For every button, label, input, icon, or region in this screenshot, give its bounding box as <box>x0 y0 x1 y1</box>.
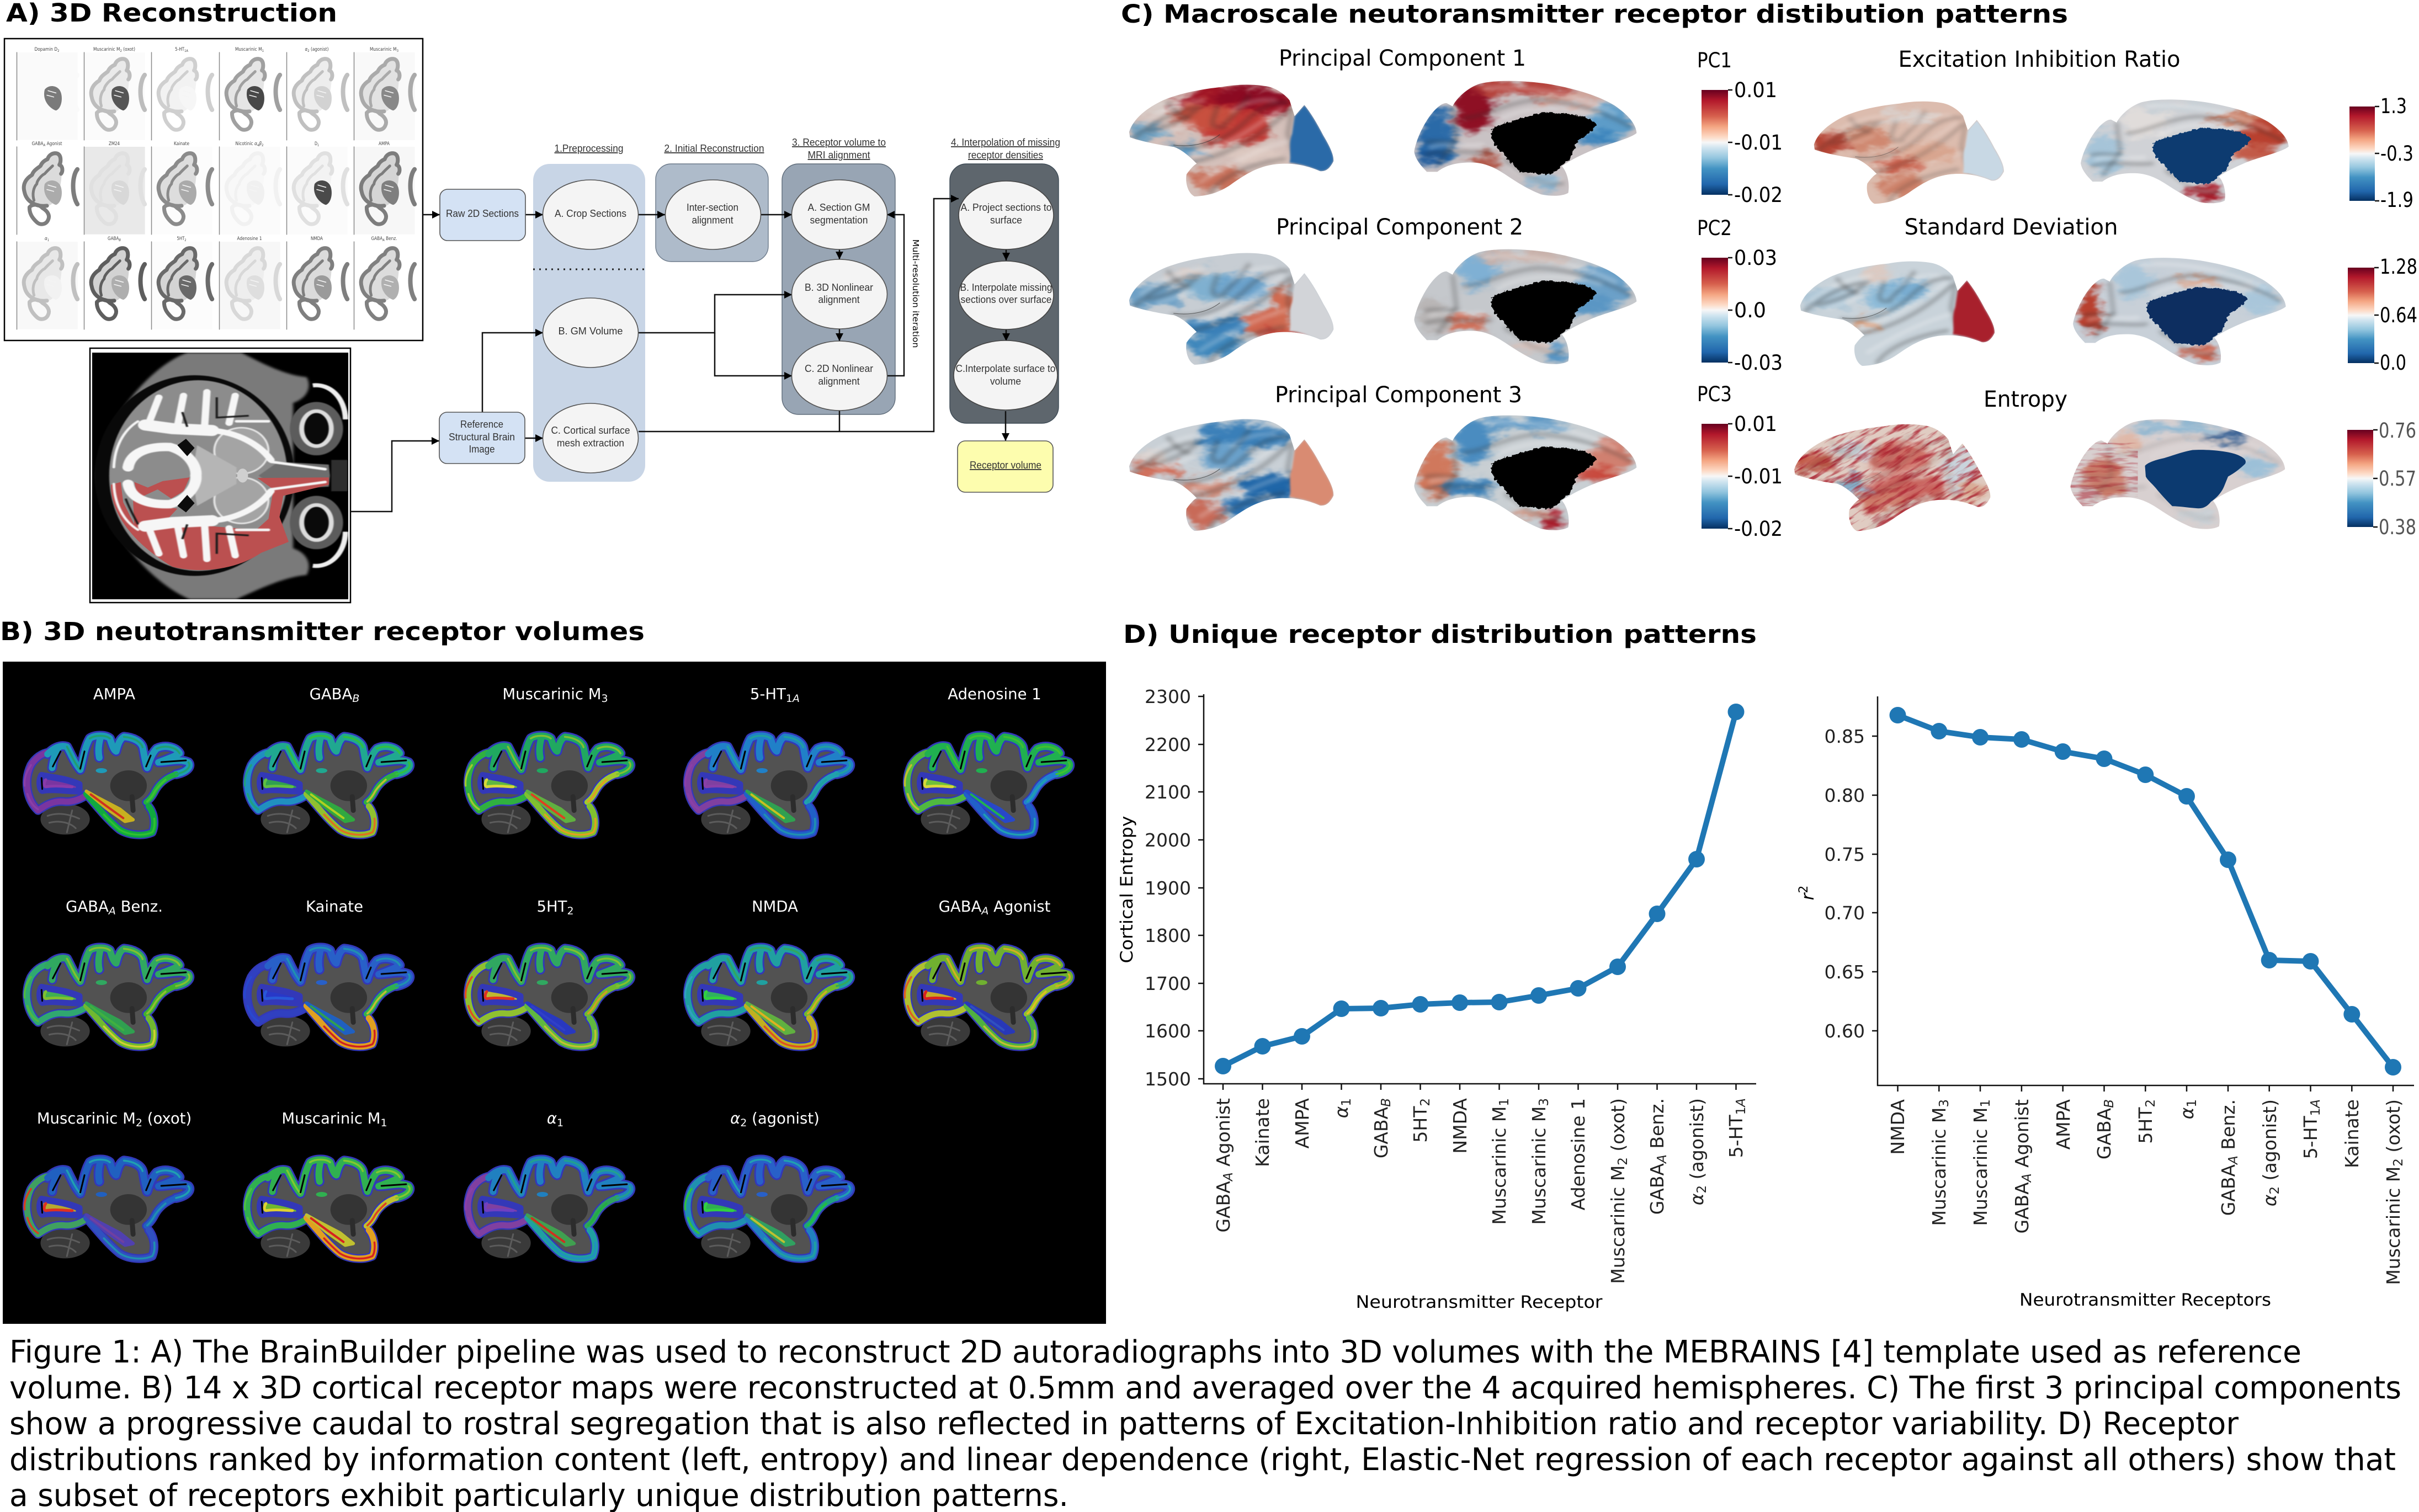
line chart: r squared: A <box>2020 1173 2034 1183</box>
autoradiograph section grid: (agonist) <box>310 47 329 52</box>
receptor map: Muscarinic M2 (oxot): (oxot) <box>142 1110 192 1127</box>
line chart: cortical entropy: Kainate <box>1252 1098 1273 1167</box>
receptor map: 5-HT1A: A <box>791 693 800 705</box>
receptor map: alpha 2 (agonist): (agonist) <box>747 1110 820 1127</box>
brain map: EI ratio medial <box>2081 99 2289 203</box>
autoradiograph section grid: 3 <box>397 49 398 53</box>
panel C: macroscale receptor distribution patterns <box>1123 3 2416 536</box>
receptor map: GABA B <box>244 685 410 835</box>
line chart: r squared: 0.85 <box>1825 726 1865 747</box>
brain map: PC2 lateral <box>1129 253 1333 365</box>
section headers: 1.Preprocessing <box>554 143 624 154</box>
line chart: r squared: GABA <box>2093 1108 2115 1159</box>
autoradiograph section grid: Muscarinic M <box>235 47 268 52</box>
autoradiograph section grid: 1 <box>47 238 49 242</box>
step nodes <box>543 180 1057 473</box>
line chart: r squared: α <box>2259 1194 2280 1206</box>
colorbar: PC2: -0.03 <box>1734 351 1783 375</box>
line chart: r squared: 0.75 <box>1825 844 1865 865</box>
output box: receptor volume <box>958 441 1053 492</box>
receptor map: GABA A Agonist: GABA <box>939 898 981 915</box>
step nodes: Inter-section <box>687 202 738 213</box>
input boxes: Image <box>469 444 495 455</box>
receptor map: 5-HT1A <box>685 685 850 835</box>
receptor map: 5HT2: 5HT <box>536 898 567 915</box>
autoradiograph section grid: Nicotinic α <box>235 141 258 147</box>
line chart: cortical entropy: GABA <box>1370 1107 1392 1158</box>
step nodes: A. Crop Sections <box>555 208 626 219</box>
autoradiograph section grid: AMPA <box>379 141 390 147</box>
panel A: 3D Reconstruction <box>4 0 1060 603</box>
flow diagram <box>350 137 1060 512</box>
line chart: r squared: 0.65 <box>1825 961 1865 983</box>
brain titles: Excitation Inhibition Ratio <box>1899 47 2180 72</box>
line chart: r squared: 5HT <box>2135 1108 2156 1144</box>
section headers: 4. Interpolation of missing <box>951 137 1060 148</box>
output box: receptor volume: Receptor volume <box>970 460 1041 471</box>
colorbar: PC3: PC3 <box>1697 382 1732 406</box>
line chart: r squared: r <box>1798 892 1818 900</box>
line chart: cortical entropy: α <box>1686 1193 1708 1205</box>
step nodes: C. Cortical surface <box>551 425 630 436</box>
receptor map: GABA B: GABA <box>310 685 352 703</box>
autoradiograph section grid: NMDA <box>311 236 323 242</box>
step nodes: C. 2D Nonlinear <box>805 363 873 374</box>
line chart: cortical entropy: 1900 <box>1145 877 1191 899</box>
autoradiograph section grid: Agonist <box>45 141 62 147</box>
section headers <box>554 137 1060 161</box>
line chart: r squared: 2 <box>2268 1186 2282 1194</box>
receptor map: GABA A Benz <box>24 898 189 1047</box>
brain map: standard deviation lateral <box>1800 262 1995 366</box>
black volume panel <box>3 662 1106 1324</box>
heading: B) 3D neutotransmitter receptor volumes: B) 3D neutotransmitter receptor volumes <box>0 617 645 646</box>
receptor map: GABA A Benz: GABA <box>66 898 109 915</box>
figure caption <box>9 1334 2401 1512</box>
line chart: r squared: α <box>2176 1107 2198 1119</box>
line chart: cortical entropy <box>1117 686 1756 1312</box>
brain titles: Principal Component 1 <box>1279 46 1526 71</box>
autoradiograph section grid: (oxot) <box>122 47 135 52</box>
brain titles: Standard Deviation <box>1904 215 2118 240</box>
step nodes: surface <box>990 215 1022 226</box>
receptor map: 5HT2: 2 <box>567 905 574 917</box>
line chart: cortical entropy: NMDA <box>1449 1098 1471 1154</box>
autoradiograph section grid: ZM24 <box>109 141 120 147</box>
autoradiograph section grid: α <box>305 47 307 52</box>
line chart: cortical entropy: A <box>1655 1154 1670 1164</box>
line chart: cortical entropy: 5HT <box>1410 1106 1431 1143</box>
figure caption: distributions ranked by information content (left, entropy) and linear dependence (right, Elastic-Net regression of each receptor against all others) show that <box>9 1442 2396 1478</box>
brain titles: Entropy <box>1984 387 2067 412</box>
autoradiograph section grid: GABA <box>32 141 46 147</box>
line chart: cortical entropy: 2200 <box>1145 734 1191 755</box>
autoradiograph section grid: 5HT <box>177 236 187 242</box>
line chart: r squared: 1 <box>2185 1099 2199 1108</box>
brain titles <box>1275 46 2180 412</box>
brain map: PC3 medial <box>1414 415 1637 530</box>
line chart: r squared: 2 <box>1797 886 1811 893</box>
step nodes: segmentation <box>810 215 868 226</box>
input boxes <box>439 189 525 464</box>
brain map: entropy lateral <box>1794 424 1990 531</box>
step nodes: mesh extraction <box>557 438 624 449</box>
line chart: cortical entropy: 1500 <box>1145 1068 1191 1090</box>
autoradiograph section grid: Muscarinic M <box>370 47 402 52</box>
line chart: cortical entropy: 1600 <box>1145 1020 1191 1042</box>
line chart: r squared: A <box>2226 1156 2241 1165</box>
line chart: r squared: 0.60 <box>1825 1020 1865 1042</box>
line chart: r squared <box>1797 696 2414 1310</box>
brain map: PC2 medial <box>1414 249 1637 364</box>
cortex mask <box>111 477 329 570</box>
line chart: cortical entropy: (agonist) <box>1686 1098 1708 1185</box>
line chart: cortical entropy: AMPA <box>1291 1098 1313 1148</box>
line chart: cortical entropy: 1 <box>1339 1098 1354 1106</box>
colorbar: EI ratio: 1.3 <box>2380 94 2407 118</box>
autoradiograph section grid: GABA <box>108 236 121 242</box>
receptor map: GABA B: B <box>352 693 359 705</box>
panel D: unique receptor distribution patterns <box>1117 620 2414 1312</box>
line chart: cortical entropy: 3 <box>1537 1098 1551 1106</box>
autoradiograph section grid: A <box>382 238 385 242</box>
receptor map: GABA A Agonist <box>905 898 1070 1047</box>
line chart: r squared: NMDA <box>1887 1099 1908 1155</box>
autoradiograph section grid: α <box>45 236 47 242</box>
line chart: r squared: Kainate <box>2341 1099 2363 1168</box>
autoradiograph section grid: 5-HT <box>175 47 187 52</box>
autoradiograph section grid: 1 <box>262 49 264 53</box>
section group boxes <box>533 164 1059 482</box>
brain map: PC3 lateral <box>1129 419 1333 531</box>
input boxes: Structural Brain <box>449 432 515 443</box>
line chart: cortical entropy: Muscarinic M <box>1488 1106 1510 1225</box>
colorbar: PC2: 0.03 <box>1734 246 1777 270</box>
autoradiograph section grid: 2 <box>184 238 187 242</box>
line chart: r squared: GABA <box>2218 1164 2239 1216</box>
colorbar: PC1 <box>1697 49 1783 207</box>
line chart: cortical entropy: Adenosine 1 <box>1567 1098 1589 1210</box>
receptor map: Adenosine 1: Adenosine 1 <box>948 685 1041 703</box>
line chart: r squared: 3 <box>1937 1099 1952 1108</box>
line chart: cortical entropy: 1 <box>1497 1098 1512 1106</box>
autoradiograph section grid: Dopamin D <box>34 47 62 52</box>
receptor map: GABA A Agonist: A <box>980 905 988 917</box>
line chart: cortical entropy: 2100 <box>1145 781 1191 803</box>
receptor map: Kainate <box>244 898 410 1047</box>
label: multi-resolution iteration: Multi-resolution iteration <box>911 239 921 348</box>
line chart: r squared: 0.80 <box>1825 785 1865 806</box>
receptor map: Adenosine 1 <box>905 685 1070 835</box>
colorbar: PC3: -0.01 <box>1734 465 1783 488</box>
line chart: cortical entropy: A <box>1221 1172 1236 1182</box>
step nodes: B. Interpolate missing <box>960 282 1052 293</box>
autoradiograph section grid: A <box>43 143 45 147</box>
colorbar: PC2 <box>1697 216 1783 375</box>
line chart: r squared: Agonist <box>2011 1099 2033 1173</box>
receptor map: alpha 2 (agonist): α <box>730 1110 740 1127</box>
line chart: r squared: 1 <box>1979 1099 1993 1108</box>
receptor map: 5HT2 <box>465 898 630 1047</box>
panel B: 3D receptor volumes <box>0 617 1106 1324</box>
step nodes: alignment <box>692 215 733 226</box>
receptor map: alpha 1: α <box>547 1110 557 1127</box>
line chart: cortical entropy: 2 <box>1695 1185 1709 1193</box>
line chart: r squared: (agonist) <box>2259 1099 2280 1186</box>
autoradiograph section grid <box>4 39 423 340</box>
colorbar: PC3 <box>1697 382 1783 541</box>
step nodes: sections over surface <box>960 294 1052 305</box>
receptor map: alpha 1: 1 <box>557 1117 563 1129</box>
autoradiograph section grid: Benz. <box>385 236 397 242</box>
line chart: cortical entropy: GABA <box>1213 1181 1234 1233</box>
autoradiograph section grid: B <box>119 238 121 242</box>
autoradiograph section grid: 2 <box>262 143 264 147</box>
line chart: cortical entropy: 2000 <box>1145 829 1191 851</box>
line chart: r squared: Muscarinic M <box>1928 1108 1950 1226</box>
autoradiograph section grid: Kainate <box>174 141 189 147</box>
colorbar: PC1: -0.02 <box>1734 183 1783 207</box>
brain map: standard deviation medial <box>2073 258 2286 365</box>
receptor map: 5-HT1A: 1 <box>786 693 793 705</box>
brain map: entropy medial <box>2071 419 2285 529</box>
colorbar: PC1: PC1 <box>1697 49 1732 72</box>
colorbar: EI ratio <box>2349 94 2413 212</box>
structural MRI with red cortical mask <box>90 348 350 603</box>
step nodes: alignment <box>818 294 860 305</box>
receptor map: Muscarinic M3 <box>465 685 630 835</box>
line chart: r squared: Benz. <box>2218 1099 2239 1156</box>
receptor map: Muscarinic M3: 3 <box>601 693 608 705</box>
autoradiograph section grid: 4 <box>257 143 259 147</box>
step nodes: B. 3D Nonlinear <box>805 282 873 293</box>
receptor map: Muscarinic M1 <box>244 1110 410 1259</box>
line chart: cortical entropy: 2 <box>1616 1157 1630 1165</box>
receptor map: NMDA: NMDA <box>752 898 798 915</box>
receptor map: NMDA <box>685 898 850 1047</box>
line chart: cortical entropy: B <box>1379 1098 1394 1107</box>
colorbar: standard deviation <box>2348 255 2417 375</box>
autoradiograph section grid: β <box>258 141 262 147</box>
heading: D) Unique receptor distribution patterns: D) Unique receptor distribution patterns <box>1123 620 1757 649</box>
receptor map: Kainate: Kainate <box>306 898 363 915</box>
line chart: r squared: B <box>2102 1099 2117 1108</box>
step nodes: A. Section GM <box>808 202 870 213</box>
line chart: r squared: AMPA <box>2053 1099 2074 1149</box>
line chart: cortical entropy: 1 <box>1734 1107 1748 1115</box>
line chart: cortical entropy: Neurotransmitter Receptor <box>1355 1292 1603 1312</box>
line chart: r squared: Muscarinic M <box>1970 1108 1991 1226</box>
colorbar: PC3: 0.01 <box>1734 412 1777 436</box>
section headers: 2. Initial Reconstruction <box>664 143 764 154</box>
brain map: PC1 lateral <box>1129 85 1333 196</box>
receptor map: GABA A Agonist: Agonist <box>988 898 1051 915</box>
colorbar: PC1: -0.01 <box>1734 131 1783 155</box>
line chart: cortical entropy: Muscarinic M <box>1607 1165 1629 1284</box>
receptor map: alpha 1 <box>465 1110 630 1259</box>
line chart: r squared: 5-HT <box>2300 1116 2321 1159</box>
input boxes: Raw 2D Sections <box>446 208 519 219</box>
step nodes: C.Interpolate surface to <box>956 363 1055 374</box>
autoradiograph section grid: 1 <box>317 143 319 147</box>
receptor map: AMPA: AMPA <box>93 685 135 703</box>
line chart: r squared: GABA <box>2011 1182 2033 1234</box>
figure caption: show a progressive caudal to rostral segregation that is also reflected in patterns of Excitation-Inhibition ratio and receptor variability. D) Receptor <box>9 1406 2239 1442</box>
receptor map: AMPA <box>24 685 189 835</box>
figure caption: Figure 1: A) The BrainBuilder pipeline was used to reconstruct 2D autoradiographs into 3D volumes with the MEBRAINS [4] template used as reference <box>9 1334 2301 1370</box>
line chart: cortical entropy: α <box>1331 1106 1352 1118</box>
receptor map: alpha 2 (agonist): 2 <box>740 1117 747 1129</box>
receptor map: alpha 2 (agonist) <box>685 1110 850 1259</box>
line chart: cortical entropy: (oxot) <box>1607 1098 1629 1157</box>
section headers: 3. Receptor volume to <box>792 137 886 148</box>
line chart: cortical entropy: GABA <box>1646 1163 1668 1215</box>
receptor map: 5-HT1A: 5-HT <box>750 685 786 703</box>
line chart: r squared: A <box>2309 1099 2323 1109</box>
line chart: cortical entropy: 1800 <box>1145 925 1191 946</box>
line chart: r squared: 1 <box>2309 1108 2323 1116</box>
input boxes: Reference <box>460 419 503 430</box>
line chart: cortical entropy: A <box>1734 1098 1748 1108</box>
step nodes: B. GM Volume <box>559 326 623 337</box>
colorbar: standard deviation: 0.0 <box>2380 351 2406 375</box>
line chart: cortical entropy: 5-HT <box>1725 1115 1747 1158</box>
line chart: cortical entropy: 2300 <box>1145 686 1191 707</box>
brain titles: Principal Component 3 <box>1275 382 1522 408</box>
receptor map: Muscarinic M1: 1 <box>380 1117 387 1129</box>
section headers: receptor densities <box>968 150 1043 161</box>
autoradiograph section grid: D <box>315 141 318 147</box>
step nodes: volume <box>990 376 1021 387</box>
receptor map: Muscarinic M2 (oxot) <box>24 1110 192 1259</box>
figure caption: volume. B) 14 x 3D cortical receptor maps were reconstructed at 0.5mm and averaged over the 4 acquired hemispheres. C) The first 3 principal components <box>9 1370 2401 1406</box>
brain map: PC1 medial <box>1414 81 1637 196</box>
heading: C) Macroscale: C) Macroscale neutoransmitter receptor distibution patterns <box>1121 0 2068 29</box>
connector arrows <box>350 199 1006 512</box>
autoradiograph section grid: 2 <box>120 49 122 53</box>
line chart: r squared: 2 <box>2391 1158 2406 1167</box>
receptor map: Muscarinic M2 (oxot): 2 <box>136 1117 142 1129</box>
colorbar: PC2: 0.0 <box>1734 299 1766 322</box>
autoradiograph section grid: 2 <box>57 49 60 53</box>
line chart: r squared: Neurotransmitter Receptors <box>2019 1290 2271 1310</box>
autoradiograph section grid: Adenosine 1 <box>237 236 262 242</box>
step nodes: A. Project sections to <box>960 202 1052 213</box>
colorbar: entropy <box>2347 419 2416 539</box>
step nodes: alignment <box>818 376 860 387</box>
line chart: cortical entropy: 1700 <box>1145 973 1191 994</box>
brain titles: Principal Component 2 <box>1276 215 1523 240</box>
autoradiograph section grid: GABA <box>371 236 385 242</box>
section headers: MRI alignment <box>808 150 870 161</box>
colorbar: PC1: 0.01 <box>1734 78 1777 102</box>
line chart: cortical entropy: Benz. <box>1646 1098 1668 1154</box>
line chart: r squared: (oxot) <box>2383 1099 2404 1158</box>
autoradiograph section grid: 2 <box>307 49 310 53</box>
line chart: r squared: 2 <box>2144 1099 2158 1108</box>
receptor map: Muscarinic M2 (oxot): Muscarinic M <box>37 1110 136 1127</box>
receptor map: Muscarinic M1: Muscarinic M <box>281 1110 380 1127</box>
colorbar: PC3: -0.02 <box>1734 517 1783 541</box>
line chart: cortical entropy: Agonist <box>1213 1098 1234 1172</box>
receptor map: GABA A Benz: Benz. <box>116 898 163 915</box>
line chart: r squared: Muscarinic M <box>2383 1167 2404 1285</box>
brain map: EI ratio lateral <box>1814 102 2004 204</box>
receptor map: Muscarinic M3: Muscarinic M <box>502 685 601 703</box>
line chart: cortical entropy: Muscarinic M <box>1528 1106 1550 1225</box>
line chart: cortical entropy: Cortical Entropy <box>1117 816 1137 963</box>
line chart: r squared: 0.70 <box>1825 902 1865 924</box>
autoradiograph section grid: 1A <box>184 49 188 53</box>
colorbar: PC2: PC2 <box>1697 216 1732 240</box>
receptor map: GABA A Benz: A <box>108 905 116 917</box>
line chart: cortical entropy: 2 <box>1418 1098 1433 1106</box>
autoradiograph section grid: Muscarinic M <box>93 47 126 52</box>
